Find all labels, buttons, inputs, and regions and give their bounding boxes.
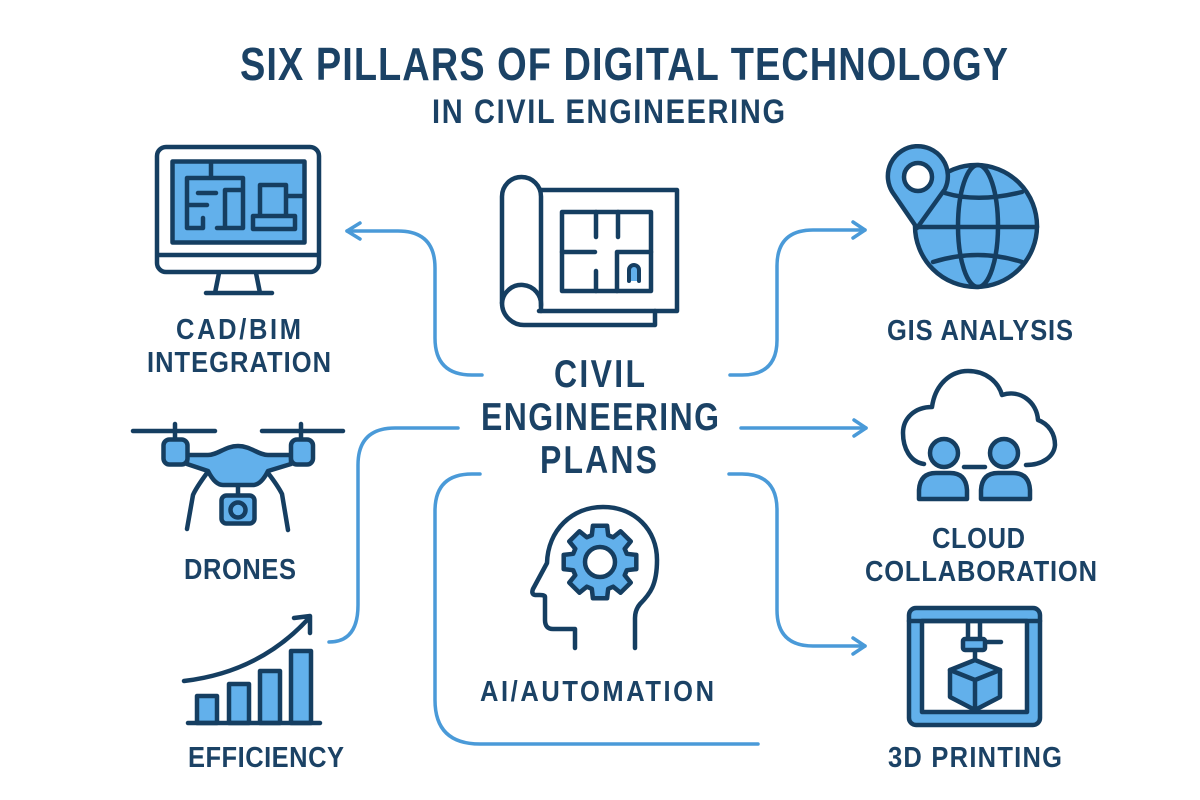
label: CAD/BIM integration [147,312,331,378]
center label: civil engineering plans [481,352,719,482]
label: CAD/BIM integration: CAD/BIM [176,312,301,345]
center label: civil engineering plans: PLANS [540,438,657,482]
panel: GIS analysis [887,146,1073,346]
label: cloud collaboration: COLLABORATION [865,554,1097,587]
icon: blueprint roll [502,177,677,325]
center label: civil engineering plans: ENGINEERING [481,395,719,439]
label: 3D printing: 3D PRINTING [888,740,1062,773]
title [240,38,1008,131]
label: cloud collaboration: CLOUD [932,521,1025,554]
panel: efficiency [184,616,344,773]
center label: civil engineering plans: CIVIL [554,352,645,396]
icon: monitor with plan [157,147,319,293]
panel: AI/automation [480,507,714,707]
icon: 3D printer [909,608,1040,725]
icon: drone [133,424,343,530]
icon: globe with location pin [888,146,1037,287]
icon: rising bar chart [184,616,320,723]
icon: head with gear [532,507,657,648]
label: cloud collaboration [865,521,1097,587]
heading: subtitle: IN CIVIL ENGINEERING [432,92,785,131]
panel: cloud collaboration [865,371,1097,587]
icon: cloud with two users [903,371,1055,499]
panel: drones [133,424,343,585]
arrow: center to CAD/BIM [347,223,482,375]
label: efficiency: EFFICIENCY [188,740,344,773]
label: drones: DRONES [184,552,296,585]
arrow: center to GIS analysis [730,222,865,375]
label: AI/automation: AI/AUTOMATION [480,674,714,707]
arrow: center to 3D printing [729,474,865,654]
label: CAD/BIM integration: INTEGRATION [147,345,331,378]
panel: CAD/BIM integration [147,147,331,378]
arrow: center to AI/automation loop [435,474,758,744]
arrow: center to cloud collaboration [741,420,866,436]
arrow: efficiency to center [329,428,458,642]
panel: 3D printing [888,608,1062,773]
label: GIS analysis: GIS ANALYSIS [887,313,1073,346]
heading: main title: SIX PILLARS OF DIGITAL TECHNOLOGY [240,38,1008,90]
